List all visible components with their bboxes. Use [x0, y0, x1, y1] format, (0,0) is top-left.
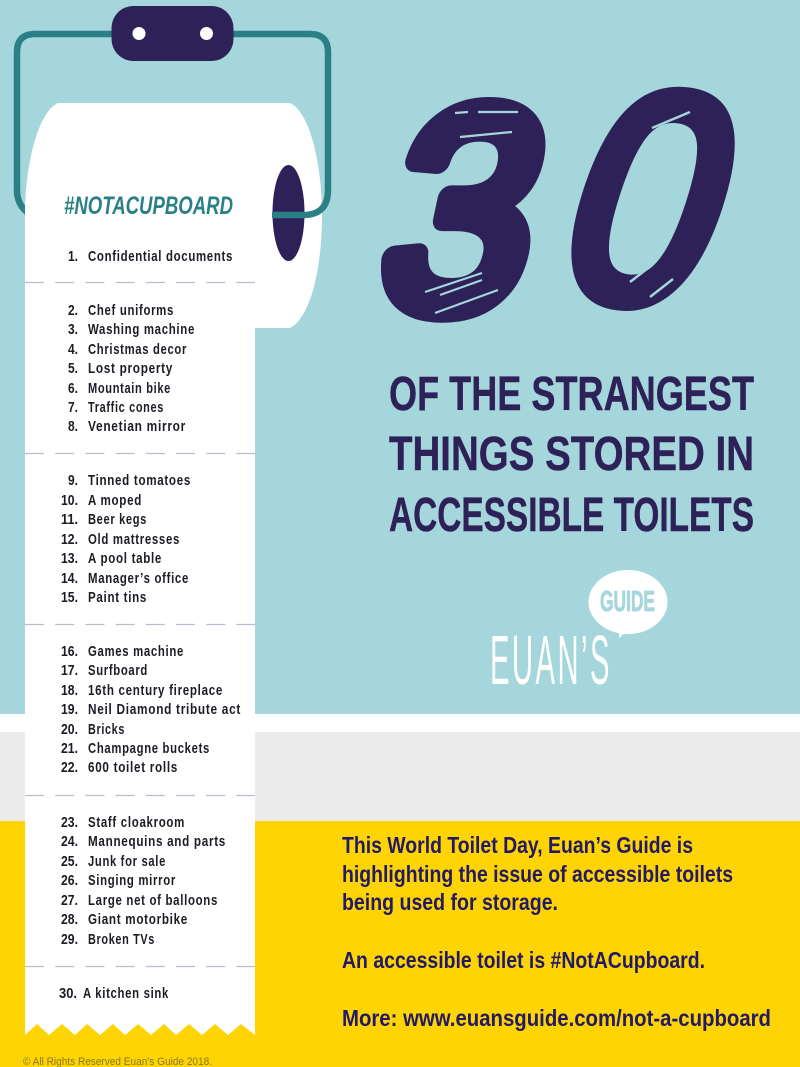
big number 30: 0 — [522, 25, 784, 373]
numbered list of 30 items: 9. — [68, 472, 78, 489]
numbered list of 30 items: 30. — [59, 985, 77, 1002]
numbered list of 30 items: 15. — [61, 589, 78, 606]
numbered list of 30 items: A moped — [88, 492, 142, 509]
big number 30: 3 — [359, 50, 573, 369]
numbered list of 30 items: Surfboard — [88, 662, 148, 679]
numbered list of 30 items: 600 toilet rolls — [88, 759, 178, 776]
numbered list of 30 items: 18. — [61, 682, 78, 699]
hashtag heading: #NOTACUPBOARD — [64, 192, 233, 220]
numbered list of 30 items: Junk for sale — [88, 853, 166, 870]
logo: Euan's Guide — [490, 570, 668, 699]
numbered list of 30 items: 25. — [61, 853, 78, 870]
numbered list of 30 items: 10. — [61, 492, 78, 509]
numbered list of 30 items: Mannequins and parts — [88, 833, 226, 850]
logo: Euan's Guide: EUAN’S — [490, 621, 612, 699]
numbered list of 30 items: Chef uniforms — [88, 302, 174, 319]
numbered list of 30 items: Neil Diamond tribute act — [88, 701, 241, 718]
numbered list of 30 items: 6. — [68, 380, 78, 397]
body text: World Toilet Day message: This World Toilet Day, Euan’s Guide is — [342, 832, 693, 858]
numbered list of 30 items: 27. — [61, 892, 78, 909]
numbered list of 30 items: Games machine — [88, 643, 184, 660]
numbered list of 30 items: Large net of balloons — [88, 892, 218, 909]
numbered list of 30 items: 12. — [61, 531, 78, 548]
numbered list of 30 items: Tinned tomatoes — [88, 472, 191, 489]
numbered list of 30 items: Beer kegs — [88, 511, 147, 528]
numbered list of 30 items: Bricks — [88, 721, 125, 738]
numbered list of 30 items: 8. — [68, 418, 78, 435]
numbered list of 30 items: 16th century fireplace — [88, 682, 223, 699]
numbered list of 30 items: Washing machine — [88, 321, 195, 338]
numbered list of 30 items: 16. — [61, 643, 78, 660]
icon: toilet roll with paper strip — [23, 103, 328, 1036]
big number 30 — [358, 25, 784, 373]
body text: World Toilet Day message: An accessible toilet is #NotACupboard. — [342, 947, 705, 973]
numbered list of 30 items: Confidential documents — [88, 248, 233, 265]
numbered list of 30 items: 5. — [68, 360, 78, 377]
numbered list of 30 items: 13. — [61, 550, 78, 567]
numbered list of 30 items: A kitchen sink — [83, 985, 169, 1002]
numbered list of 30 items: 24. — [61, 833, 78, 850]
icon: toilet roll holder — [17, 6, 328, 212]
numbered list of 30 items: Singing mirror — [88, 872, 176, 889]
numbered list of 30 items: Giant motorbike — [88, 911, 188, 928]
numbered list of 30 items: 11. — [61, 511, 78, 528]
numbered list of 30 items — [59, 248, 241, 1002]
numbered list of 30 items: 29. — [61, 931, 78, 948]
numbered list of 30 items: 3. — [68, 321, 78, 338]
numbered list of 30 items: 19. — [61, 701, 78, 718]
numbered list of 30 items: 28. — [61, 911, 78, 928]
numbered list of 30 items: 21. — [61, 740, 78, 757]
numbered list of 30 items: 2. — [68, 302, 78, 319]
headline — [389, 368, 754, 542]
numbered list of 30 items: Staff cloakroom — [88, 814, 185, 831]
numbered list of 30 items: 22. — [61, 759, 78, 776]
body text: World Toilet Day message: highlighting the issue of accessible toilets — [342, 861, 733, 887]
numbered list of 30 items: Champagne buckets — [88, 740, 210, 757]
numbered list of 30 items: Paint tins — [88, 589, 147, 606]
numbered list of 30 items: Christmas decor — [88, 341, 187, 358]
numbered list of 30 items: 17. — [61, 662, 78, 679]
body text: World Toilet Day message — [342, 832, 771, 1031]
numbered list of 30 items: Broken TVs — [88, 931, 155, 948]
numbered list of 30 items: Manager’s office — [88, 570, 189, 587]
numbered list of 30 items: A pool table — [88, 550, 162, 567]
numbered list of 30 items: 26. — [61, 872, 78, 889]
numbered list of 30 items: 4. — [68, 341, 78, 358]
logo: Euan's Guide: GUIDE — [600, 586, 655, 618]
numbered list of 30 items: Traffic cones — [88, 399, 164, 416]
numbered list of 30 items: Mountain bike — [88, 380, 171, 397]
numbered list of 30 items: 7. — [68, 399, 78, 416]
numbered list of 30 items: 20. — [61, 721, 78, 738]
body text: World Toilet Day message: being used for storage. — [342, 889, 558, 915]
numbered list of 30 items: Lost property — [88, 360, 173, 377]
numbered list of 30 items: Venetian mirror — [88, 418, 186, 435]
numbered list of 30 items: 14. — [61, 570, 78, 587]
numbered list of 30 items: Old mattresses — [88, 531, 180, 548]
numbered list of 30 items: 1. — [68, 248, 78, 265]
numbered list of 30 items: 23. — [61, 814, 78, 831]
